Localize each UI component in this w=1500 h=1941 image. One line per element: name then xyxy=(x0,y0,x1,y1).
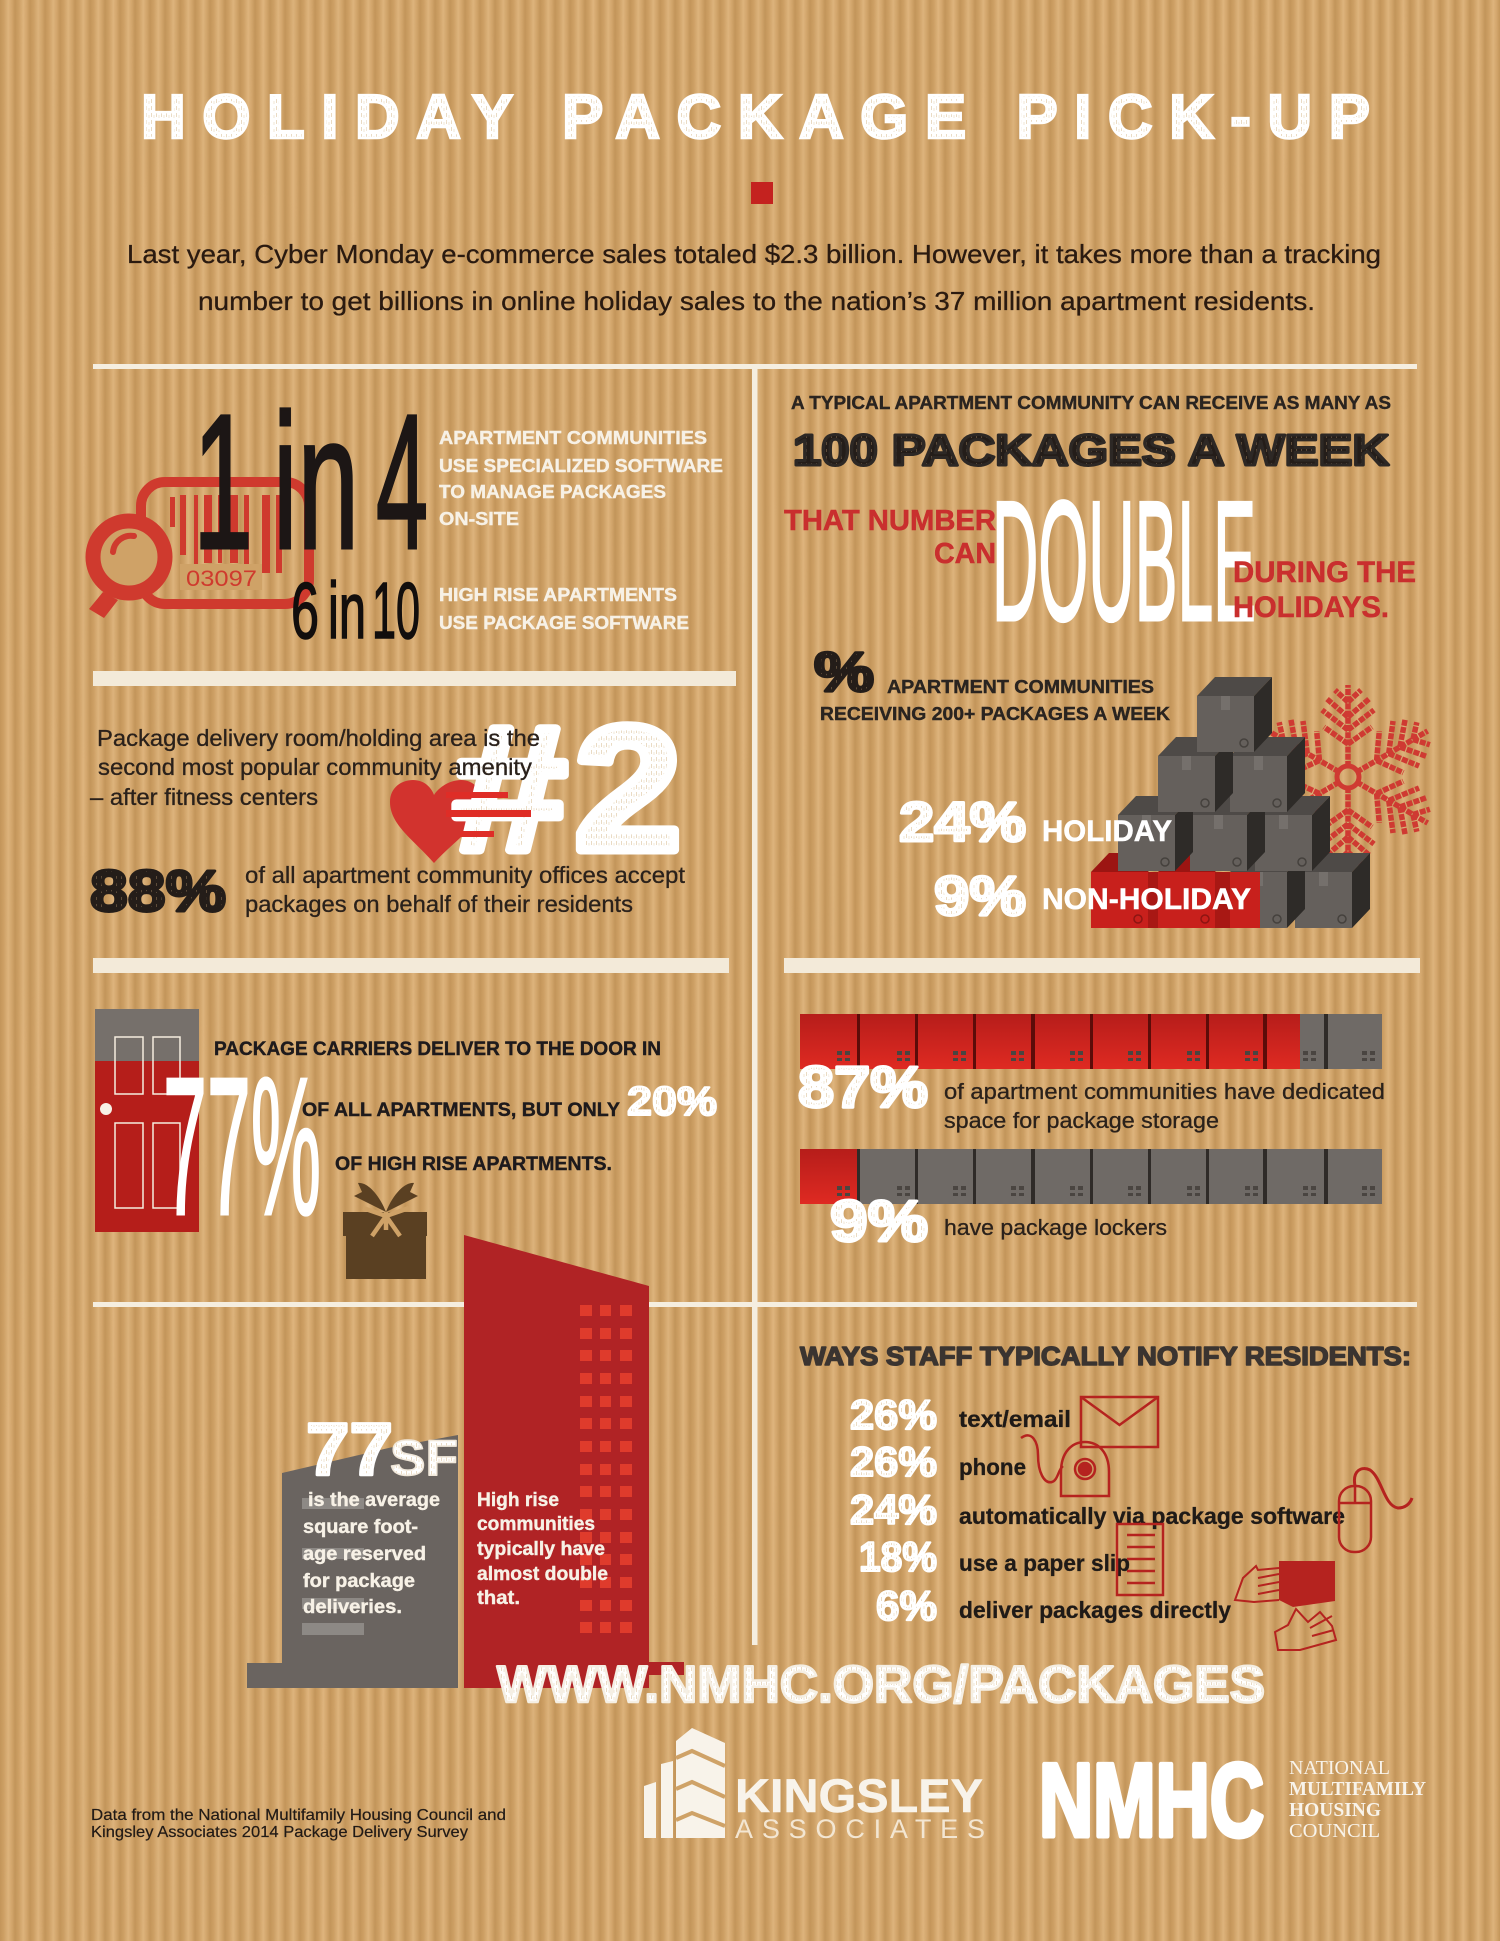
text: high rise communities xyxy=(477,1490,608,1609)
text: high rise communities: almost double xyxy=(477,1564,608,1585)
icon: barcode and magnifying glass xyxy=(89,482,309,618)
list: percentages xyxy=(850,1391,937,1629)
text: apartment communities: ON-SITE xyxy=(439,509,519,529)
panel: package software xyxy=(89,374,723,655)
stat: 24% holiday: HOLIDAY xyxy=(1042,815,1172,848)
logo: NMHC: HOUSING xyxy=(1289,1799,1381,1821)
panel: packages per week xyxy=(784,393,1416,657)
text: average square footage: for package xyxy=(303,1571,415,1592)
stat: #2: 2 xyxy=(574,689,682,888)
stat: 24% holiday: 24% xyxy=(899,790,1026,853)
logo: NMHC: MULTIFAMILY xyxy=(1289,1778,1427,1800)
icon: heart xyxy=(390,780,482,863)
stat: 9%: 9% xyxy=(830,1189,928,1254)
icon: stacked boxes xyxy=(1091,677,1370,928)
text: receiving 200+ packages xyxy=(820,677,1170,724)
stat: 1 in 4 xyxy=(193,374,428,589)
text: receiving 200+ packages: RECEIVING 200+ PACKAGES A WEEK xyxy=(820,704,1170,724)
heading: 100 packages a week: 100 PACKAGES A WEEK xyxy=(793,426,1389,475)
text: dedicated space xyxy=(944,1079,1385,1133)
stat: 24% holiday xyxy=(899,790,1172,853)
panel: package software: 4 xyxy=(376,374,428,589)
stat: 9% non-holiday: 9% xyxy=(934,864,1026,927)
icon: speed lines xyxy=(446,792,531,837)
stat: 77 SF xyxy=(306,1408,458,1491)
text: delivery room: Package delivery room/holding area is the xyxy=(97,725,540,751)
text: offices accept: of all apartment community offices accept xyxy=(245,862,686,888)
icon: telephone xyxy=(1021,1435,1109,1496)
text: that number can xyxy=(784,505,996,570)
url link text: WWW.NMHC.ORG/PACKAGES xyxy=(497,1656,1265,1714)
intro text: number to get billions in online holiday sales to the nation’s 37 million apartment residents. xyxy=(198,286,1315,316)
list: percentages: 26% xyxy=(850,1391,937,1438)
text: average square footage: is the average xyxy=(308,1490,440,1511)
list: percentages: 26% xyxy=(850,1438,937,1485)
stat: 6 in 10: in xyxy=(328,566,366,655)
text: high rise apartments xyxy=(439,585,689,633)
text: delivery room xyxy=(90,725,540,810)
text: carriers deliver xyxy=(214,1039,661,1175)
icon: envelope xyxy=(1081,1397,1158,1447)
list: percentages: 6% xyxy=(876,1582,937,1629)
list: methods xyxy=(959,1406,1345,1623)
panel: 200+ packages xyxy=(814,640,1441,928)
text: average square footage: age reserved xyxy=(303,1544,426,1565)
text: high rise communities: communities xyxy=(477,1514,595,1535)
text: high rise communities: that. xyxy=(477,1588,520,1609)
list: percentages: 18% xyxy=(859,1533,937,1580)
text: apartment communities xyxy=(439,428,723,529)
text: carriers deliver: OF HIGH RISE APARTMENTS. xyxy=(335,1154,612,1175)
logo: NMHC: COUNCIL xyxy=(1289,1820,1380,1842)
text: that number can: THAT NUMBER xyxy=(784,505,996,537)
text: high rise communities: typically have xyxy=(477,1539,605,1560)
red square accent xyxy=(751,182,773,204)
panel: square footage xyxy=(247,1235,684,1688)
text: high rise apartments: USE PACKAGE SOFTWARE xyxy=(439,613,689,633)
panel: delivery to door: 77% xyxy=(163,1037,321,1256)
text: that number can: CAN xyxy=(934,538,996,570)
text: package lockers: have package lockers xyxy=(944,1215,1167,1240)
list: methods: use a paper slip xyxy=(959,1550,1130,1576)
text: typical community: A TYPICAL APARTMENT COMMUNITY CAN RECEIVE AS MANY AS xyxy=(791,393,1391,413)
text: receiving 200+ packages: APARTMENT COMMUNITIES xyxy=(887,677,1154,697)
list: percentages: 24% xyxy=(850,1486,937,1533)
chart: 87% box bar xyxy=(800,1014,1382,1069)
text: high rise apartments: HIGH RISE APARTMENTS xyxy=(439,585,677,605)
logo: NMHC: NMHC xyxy=(1039,1743,1264,1859)
stat: 6 in 10: 10 xyxy=(372,566,420,655)
panel: number two amenity xyxy=(90,689,686,924)
footer: data source xyxy=(91,1807,506,1841)
stat: 77 SF: 77 xyxy=(306,1408,393,1491)
text: average square footage: square foot- xyxy=(303,1517,418,1538)
stat: 88%: 88% xyxy=(90,859,226,924)
title: HOLIDAY PACKAGE PICK-UP xyxy=(141,83,1370,152)
stat: 77 SF: SF xyxy=(390,1430,458,1486)
stat: 1 in 4: 1 xyxy=(193,374,253,589)
icon: door xyxy=(95,1009,199,1232)
icon: percent sign: % xyxy=(814,640,874,703)
text: apartment communities: APARTMENT COMMUNITIES xyxy=(439,428,707,448)
list: methods: text/email xyxy=(959,1406,1071,1432)
icon: snowflake xyxy=(1255,685,1441,869)
stat: #2: # xyxy=(453,689,567,888)
stat: 6 in 10: 6 xyxy=(291,566,319,655)
logo: Kingsley Associates xyxy=(644,1728,985,1844)
text: average square footage: deliveries. xyxy=(303,1597,402,1618)
logo: Kingsley Associates: ASSOCIATES xyxy=(735,1814,985,1844)
list: methods: phone xyxy=(959,1454,1026,1480)
icon: grey building xyxy=(247,1435,458,1688)
text: dedicated space: of apartment communities have dedicated xyxy=(944,1079,1385,1104)
text: during the holidays: DURING THE xyxy=(1233,556,1416,589)
icon: paper slip xyxy=(1117,1524,1163,1595)
text: delivery room: second most popular community amenity xyxy=(98,754,533,780)
text: dedicated space: space for package storage xyxy=(944,1108,1219,1133)
text: carriers deliver: PACKAGE CARRIERS DELIVER TO THE DOOR IN xyxy=(214,1039,661,1060)
stat: 9% non-holiday xyxy=(934,864,1251,927)
stat: 20%: 20% xyxy=(627,1078,717,1124)
text: carriers deliver: OF ALL APARTMENTS, BUT ONLY xyxy=(302,1100,620,1121)
text: during the holidays xyxy=(1233,556,1416,624)
icon: gift xyxy=(343,1183,427,1279)
text: high rise communities: High rise xyxy=(477,1490,559,1511)
footer: data source: Data from the National Multifamily Housing Council and xyxy=(91,1807,506,1824)
heading: ways staff notify: WAYS STAFF TYPICALLY NOTIFY RESIDENTS: xyxy=(800,1341,1411,1371)
panel: ways staff notify residents xyxy=(800,1341,1412,1650)
text: during the holidays: HOLIDAYS. xyxy=(1233,591,1389,624)
stat: 87%: 87% xyxy=(798,1055,928,1120)
panel: delivery to door xyxy=(95,1009,717,1279)
footer: data source: Kingsley Associates 2014 Package Delivery Survey xyxy=(91,1824,468,1841)
text: offices accept: packages on behalf of their residents xyxy=(245,891,633,917)
text: apartment communities: TO MANAGE PACKAGES xyxy=(439,482,666,502)
text: apartment communities: USE SPECIALIZED SOFTWARE xyxy=(439,456,723,476)
list: methods: automatically via package software xyxy=(959,1503,1345,1529)
text: average square footage xyxy=(303,1490,440,1618)
icon: hands with package xyxy=(1235,1561,1336,1650)
stat: #2 xyxy=(453,689,682,888)
text: delivery room: – after fitness centers xyxy=(90,784,318,810)
icon: barcode and magnifying glass: 03097 xyxy=(186,566,257,591)
icon: computer mouse xyxy=(1339,1469,1412,1552)
stat: 1 in 4: in xyxy=(273,374,359,589)
intro text: Last year, Cyber Monday e-commerce sales totaled $2.3 billion. However, it takes more than a tracking xyxy=(127,239,1381,269)
icon: red high rise building xyxy=(464,1235,684,1688)
logo: NMHC: NATIONAL xyxy=(1289,1757,1390,1779)
chart: 9% box bar xyxy=(800,1149,1382,1204)
intro text xyxy=(127,239,1381,316)
stat: 9% non-holiday: NON-HOLIDAY xyxy=(1042,883,1251,916)
logo: Kingsley Associates: KINGSLEY xyxy=(735,1769,983,1822)
panel: storage and lockers xyxy=(798,1014,1385,1254)
list: methods: deliver packages directly xyxy=(959,1597,1231,1623)
stat: 6 in 10 xyxy=(291,566,420,655)
text: offices accept xyxy=(245,862,686,917)
